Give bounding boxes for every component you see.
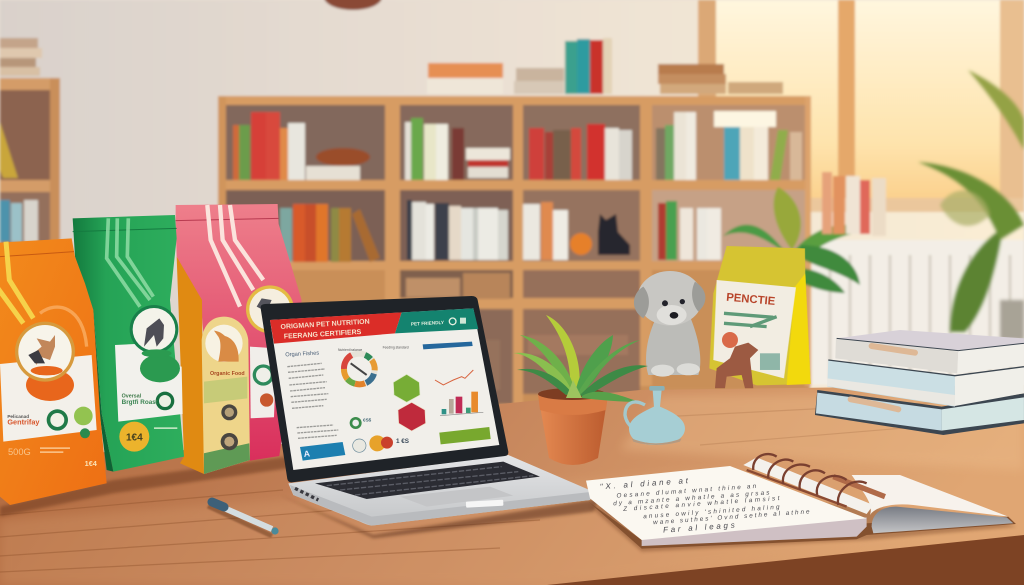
- screen blue callout: [300, 442, 345, 461]
- left handwritten page: Far al leags: [663, 521, 735, 535]
- blurred houseplant by window: [918, 70, 1024, 340]
- notebook spiral binding: [747, 454, 885, 507]
- screen header: ORIGMAN PET NUTRITION: [280, 319, 370, 331]
- yellow pet food bag and toys in the background: [634, 246, 811, 388]
- green bag: 1€4: [126, 433, 143, 444]
- open spiral notebook: [586, 454, 1017, 552]
- left handwritten page: dy a mzante a whatle a as grsas: [613, 489, 771, 507]
- left handwritten page: "X. al diane at: [600, 476, 689, 491]
- right page: [852, 475, 1013, 533]
- screen donut chart: [344, 354, 375, 384]
- screen line chart: [435, 370, 473, 385]
- green bag: [73, 215, 184, 472]
- green bag: Oversal: [122, 393, 142, 399]
- main bookshelf: [218, 96, 811, 406]
- green, pink and orange pet food bags: [0, 204, 302, 517]
- screen certification badges: [353, 435, 409, 452]
- orange bag: 500G: [8, 447, 31, 457]
- caption: Feeding standard: [383, 345, 409, 349]
- radiator: [812, 240, 1024, 385]
- laptop screen: [270, 308, 499, 470]
- books stacked on left shelf: [0, 38, 42, 76]
- small left shelf: [0, 78, 60, 248]
- bottom book: [815, 390, 1024, 435]
- plush toy dog: [634, 271, 705, 377]
- left handwritten page: Oesane dlumat wnat thine an: [616, 483, 757, 500]
- screen header: [270, 308, 478, 344]
- yellow pet food bag: PENCTIE: [726, 292, 776, 308]
- books, row one: [233, 111, 802, 180]
- screen header: FEERANG CERTIFIERS: [284, 329, 362, 341]
- donut pointer and captions: [351, 363, 367, 375]
- notebook cover: [588, 502, 1016, 549]
- left handwritten page: Z discate anvie whatle lamsist: [622, 495, 780, 513]
- screen blue callout: A: [303, 448, 311, 459]
- screen red hexagon: [398, 402, 426, 431]
- left handwritten page: [586, 466, 867, 540]
- screen header: PET FRIENDLY: [411, 320, 445, 327]
- potted plant: [513, 315, 648, 465]
- left handwritten page: anuse owily 'shinited haling: [643, 504, 780, 520]
- middle book: [827, 360, 1024, 407]
- orange bag: Gentrifay: [7, 418, 40, 427]
- plant leaves: [513, 315, 648, 402]
- orange bag: [0, 238, 107, 505]
- laptop shadow: [280, 495, 600, 538]
- laptop, drawn in 3x zoom coordinates: [261, 296, 600, 538]
- left handwritten page: wane suthes' Ovnd sethe al athne: [653, 508, 810, 526]
- stacked books on the right: [815, 330, 1024, 435]
- screen left text: [285, 351, 338, 438]
- books on top of shelf: [427, 38, 783, 94]
- pen: [208, 502, 279, 536]
- shelf plant: [723, 187, 868, 293]
- pink bag: [176, 204, 302, 461]
- laptop screen: Nutrient balance: [338, 348, 362, 352]
- gusseted pink bag side: Organic Food: [210, 371, 245, 377]
- notebook shadow: [590, 497, 1017, 552]
- desk front edge: [547, 535, 1024, 585]
- screen left text: Organ Fishes: [285, 351, 320, 358]
- bag shadow on desk: [0, 457, 300, 517]
- green bag: Brgtfi Roast: [122, 399, 159, 406]
- screen legend chip: [423, 342, 473, 349]
- notebook spine page: [743, 457, 873, 514]
- top book: [835, 330, 1024, 373]
- screen certification badges: 1 €S: [396, 438, 409, 445]
- books, row two: [280, 200, 721, 262]
- screen bar chart: [440, 392, 483, 416]
- lower shelf boxes: [406, 273, 628, 390]
- screen organic seal: [350, 417, 372, 429]
- page edges: [642, 517, 867, 546]
- books by window: [822, 172, 886, 236]
- yellow pet food bag: [709, 246, 811, 385]
- wall clock: [324, 0, 382, 10]
- laptop lid: [261, 296, 508, 482]
- screen green callout: [439, 427, 491, 444]
- blue ceramic teapot: [625, 386, 685, 445]
- orange bag: 1€4: [85, 459, 98, 468]
- gusseted pink bag side: [177, 257, 250, 474]
- screen organic seal: €S5: [363, 417, 372, 422]
- window: [698, 0, 1024, 212]
- terracotta pot: [538, 388, 608, 465]
- orange bag: Pelicanad: [7, 414, 29, 419]
- screen green hexagon: [393, 374, 420, 402]
- small brown toy dog: [715, 343, 758, 388]
- desk: [0, 385, 1024, 585]
- laptop base: [288, 455, 593, 526]
